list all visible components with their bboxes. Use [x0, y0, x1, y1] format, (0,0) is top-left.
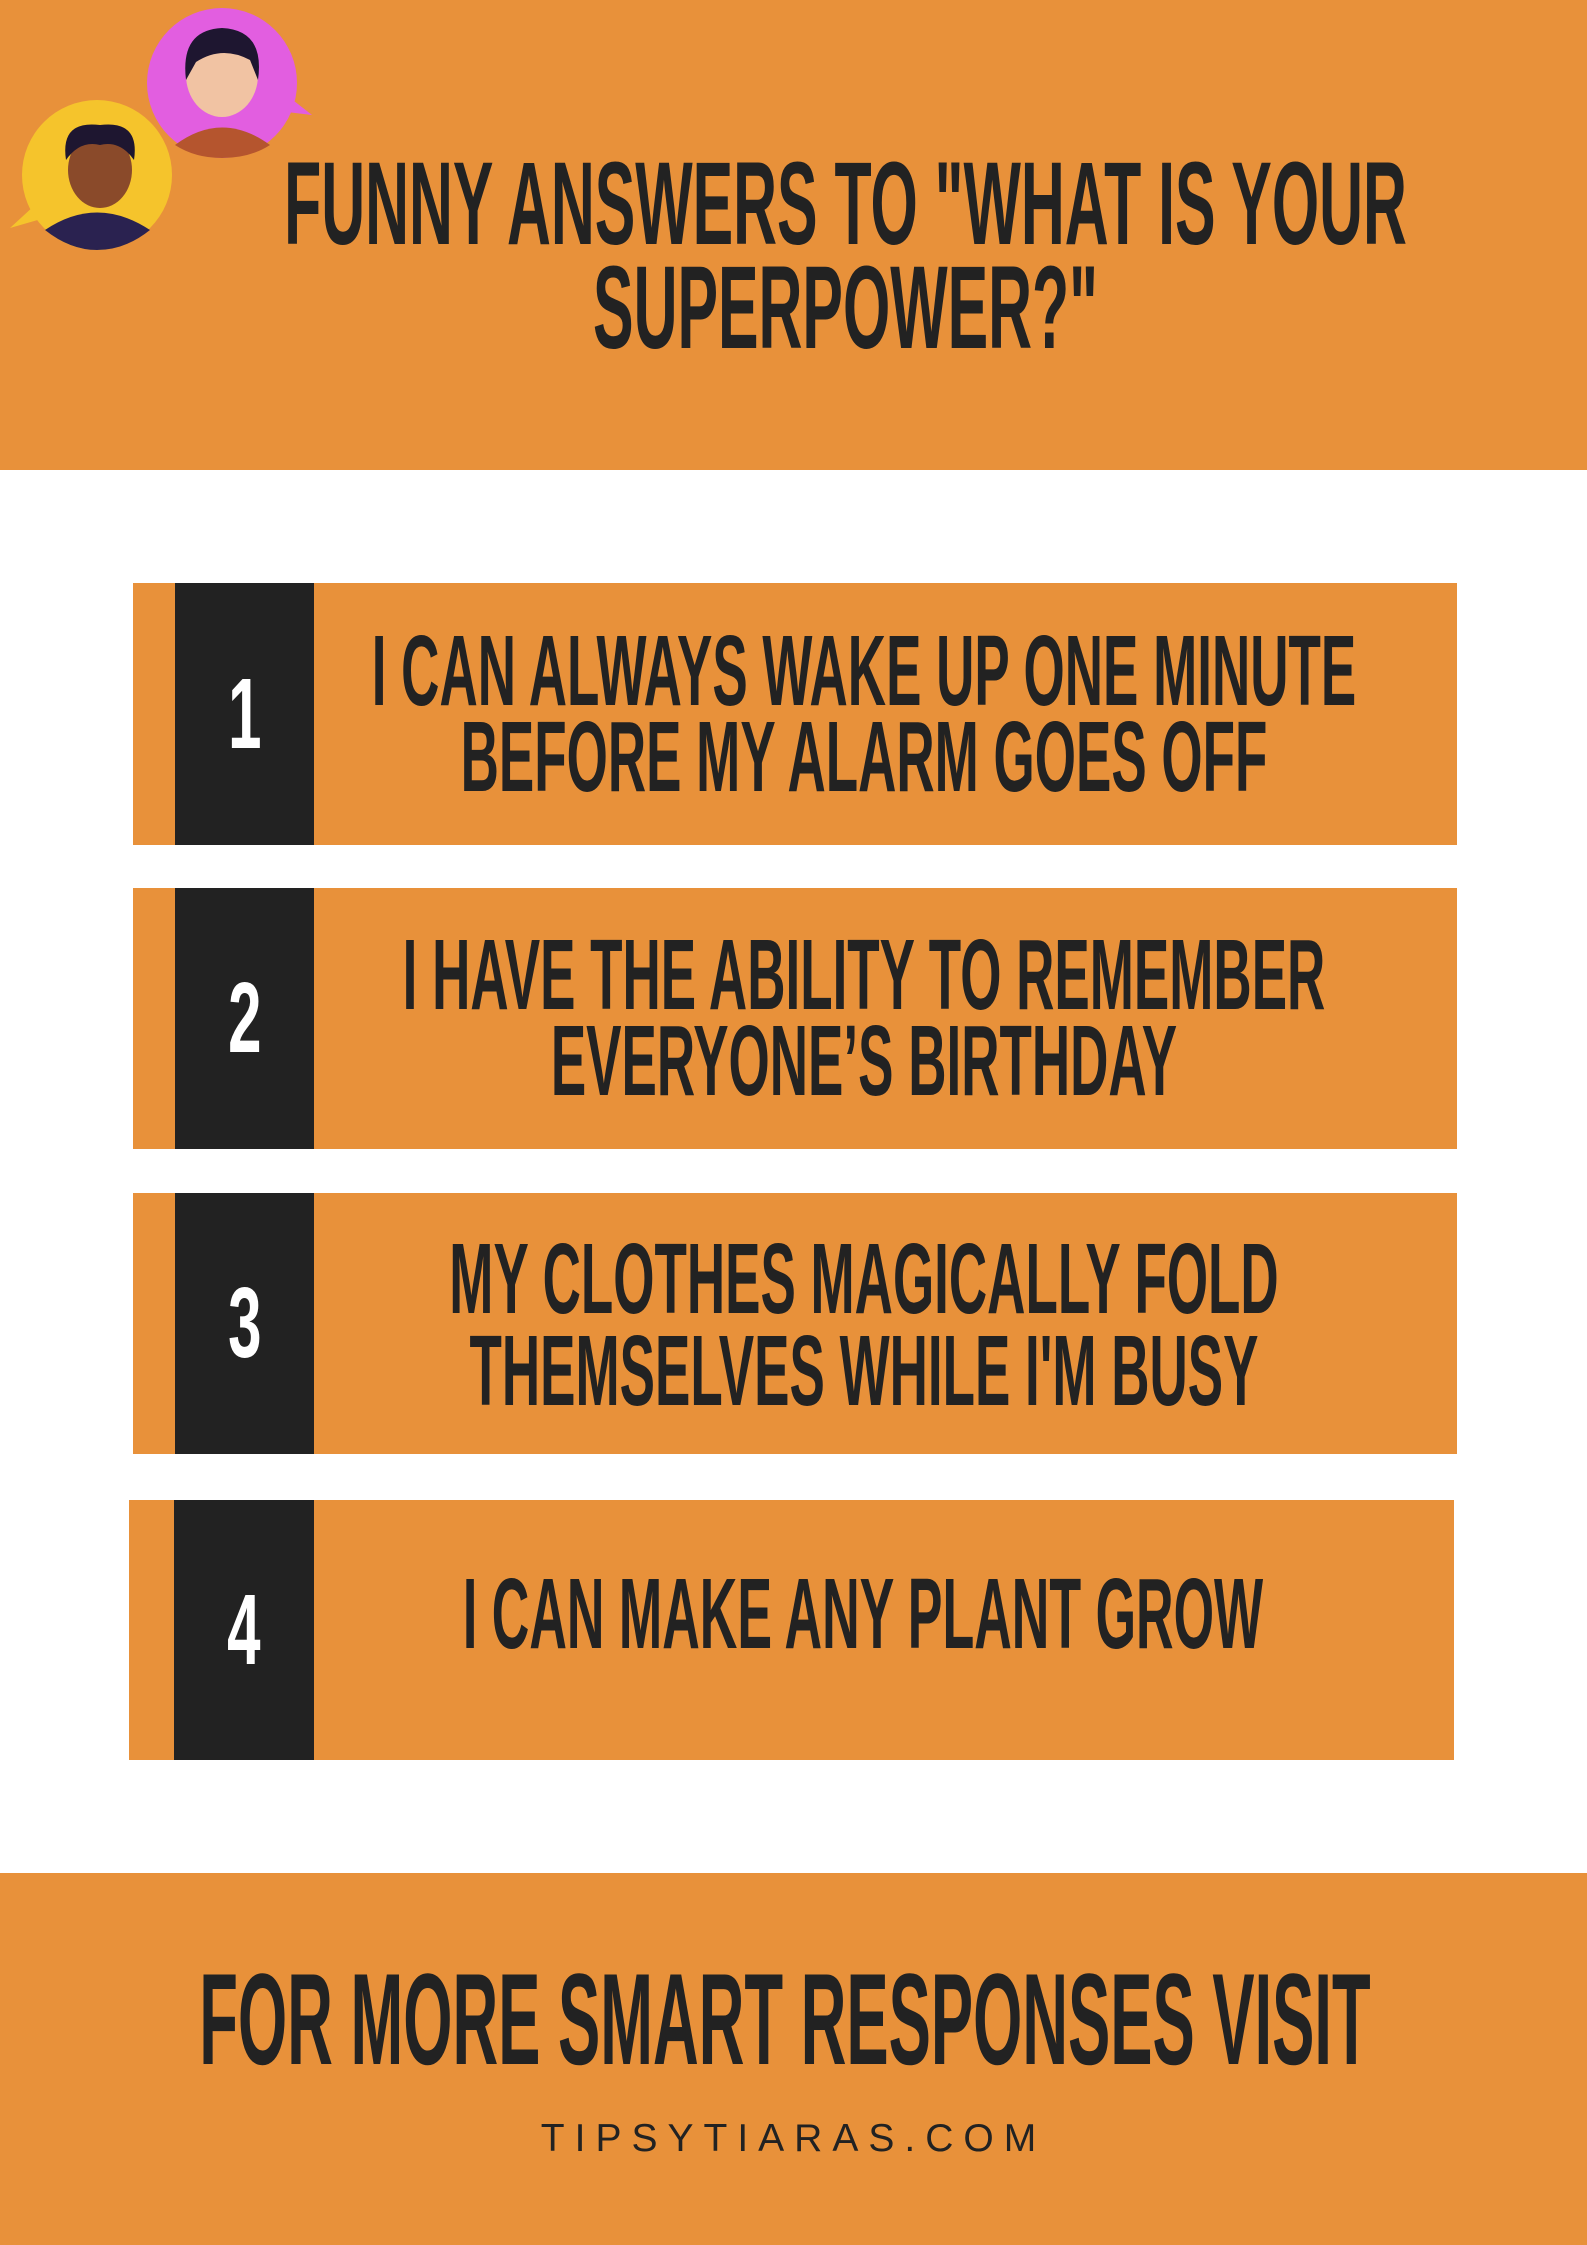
- text 3: THEMSELVES WHILE I'M BUSY: [469, 1315, 1258, 1427]
- number 3: [175, 1193, 314, 1454]
- item 1: [133, 583, 1457, 845]
- number 2: 2: [228, 962, 261, 1074]
- text 1: [372, 615, 1356, 813]
- header band: [0, 0, 1587, 470]
- title: [284, 138, 1407, 374]
- footer heading: FOR MORE SMART RESPONSES VISIT: [199, 1946, 1371, 2092]
- text 1: BEFORE MY ALARM GOES OFF: [461, 701, 1267, 813]
- item 2: [133, 888, 1457, 1149]
- footer band: [0, 1873, 1587, 2245]
- number 1: 1: [228, 658, 261, 770]
- number 1: [175, 583, 314, 845]
- item 4: [129, 1500, 1454, 1760]
- icon: avatars: [10, 8, 312, 250]
- number 4: 4: [227, 1574, 261, 1686]
- footer url: TIPSYTIARAS.COM: [541, 2117, 1046, 2160]
- title: SUPERPOWER?": [593, 242, 1098, 374]
- text 4: I CAN MAKE ANY PLANT GROW: [463, 1558, 1263, 1670]
- avatar: woman: [147, 8, 312, 158]
- number 4: [174, 1500, 314, 1760]
- text 2: EVERYONE’S BIRTHDAY: [551, 1005, 1177, 1117]
- number 3: 3: [228, 1267, 261, 1379]
- item 3: [133, 1193, 1457, 1454]
- text 1: I CAN ALWAYS WAKE UP ONE MINUTE: [372, 615, 1356, 727]
- number 2: [175, 888, 314, 1149]
- text 2: I HAVE THE ABILITY TO REMEMBER: [403, 919, 1325, 1031]
- text 3: MY CLOTHES MAGICALLY FOLD: [449, 1223, 1279, 1335]
- avatar: man: [10, 100, 172, 250]
- text 3: [449, 1223, 1279, 1427]
- text 2: [403, 919, 1325, 1117]
- title: FUNNY ANSWERS TO "WHAT IS YOUR: [284, 138, 1407, 270]
